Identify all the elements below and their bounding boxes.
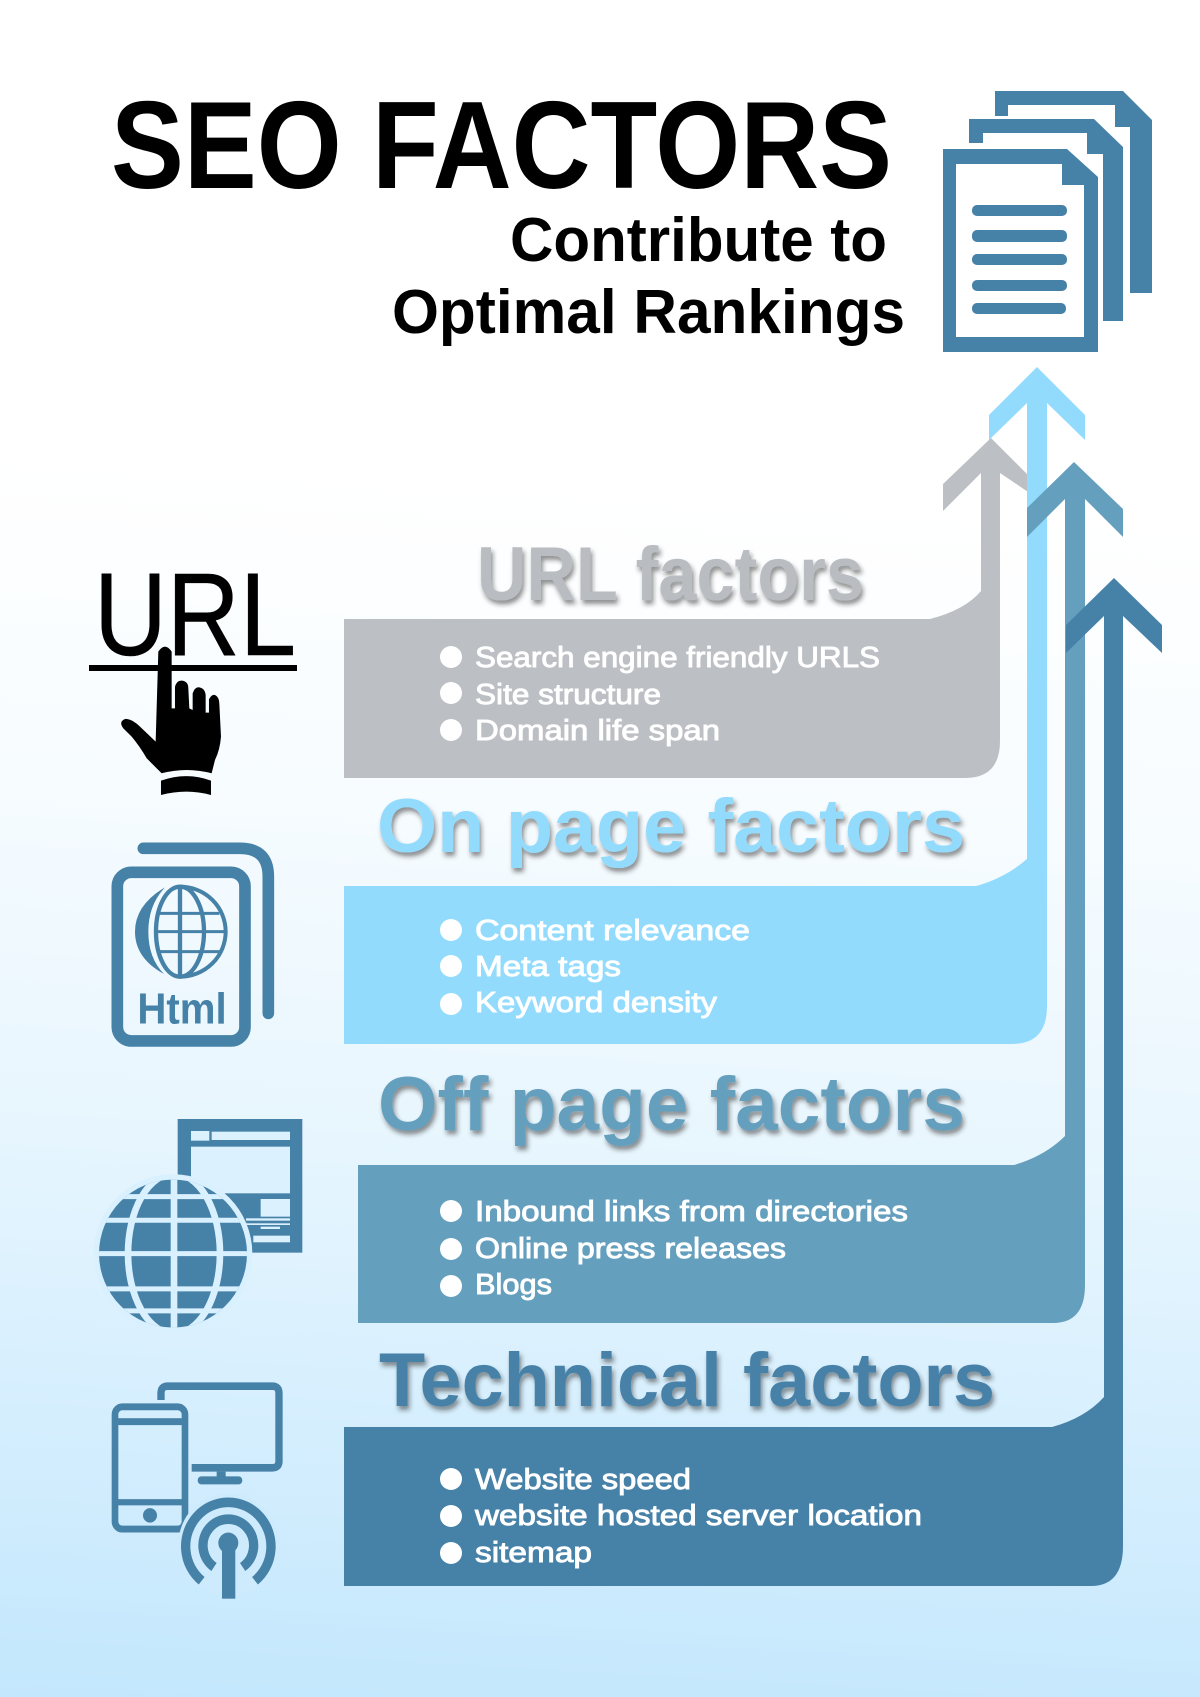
list: On page factors: Keyword density [475, 987, 718, 1019]
list: URL factors: Domain life span [475, 715, 720, 747]
list: Technical factors: sitemap [475, 1537, 592, 1569]
list: Off page factors [440, 1196, 908, 1301]
icon: devices and signal [115, 1386, 279, 1599]
icon: Html page with globe [117, 848, 268, 1041]
icon: stacked documents [943, 91, 1152, 352]
icon: URL with pointing hand: URL [94, 549, 296, 681]
list: URL factors: Site structure [475, 679, 661, 711]
heading: Technical factors: Technical factors [379, 1338, 995, 1423]
list: Off page factors: Online press releases [475, 1233, 786, 1265]
list: Technical factors: Website speed [475, 1464, 691, 1496]
list: On page factors [440, 915, 750, 1019]
heading: Off page factors: Off page factors [378, 1062, 965, 1147]
list: Technical factors [440, 1464, 922, 1569]
icon: URL with pointing hand [89, 549, 297, 795]
icon: globe and web page [93, 1119, 302, 1334]
list: Technical factors: website hosted server location [474, 1500, 922, 1532]
heading: On page factors: On page factors [377, 784, 965, 869]
list: On page factors: Content relevance [475, 915, 750, 947]
subtitle: Contribute to [510, 206, 887, 275]
panel: Off page factors ribbon and arrow [358, 462, 1123, 1323]
panel: On page factors ribbon and arrow [344, 367, 1085, 1044]
title: SEO FACTORS [111, 77, 892, 215]
list: On page factors: Meta tags [475, 951, 621, 983]
list: Off page factors: Inbound links from directories [475, 1196, 908, 1228]
icon: Html page with globe: Html [137, 985, 227, 1033]
list: URL factors [440, 642, 880, 747]
panel: Technical factors ribbon and arrow [344, 578, 1162, 1586]
panel: URL factors ribbon and arrow [344, 438, 1037, 778]
list: URL factors: Search engine friendly URLS [475, 642, 880, 674]
subtitle: Optimal Rankings [392, 278, 905, 347]
heading: URL factors: URL factors [477, 532, 864, 617]
subtitle [392, 206, 905, 347]
list: Off page factors: Blogs [475, 1269, 552, 1301]
